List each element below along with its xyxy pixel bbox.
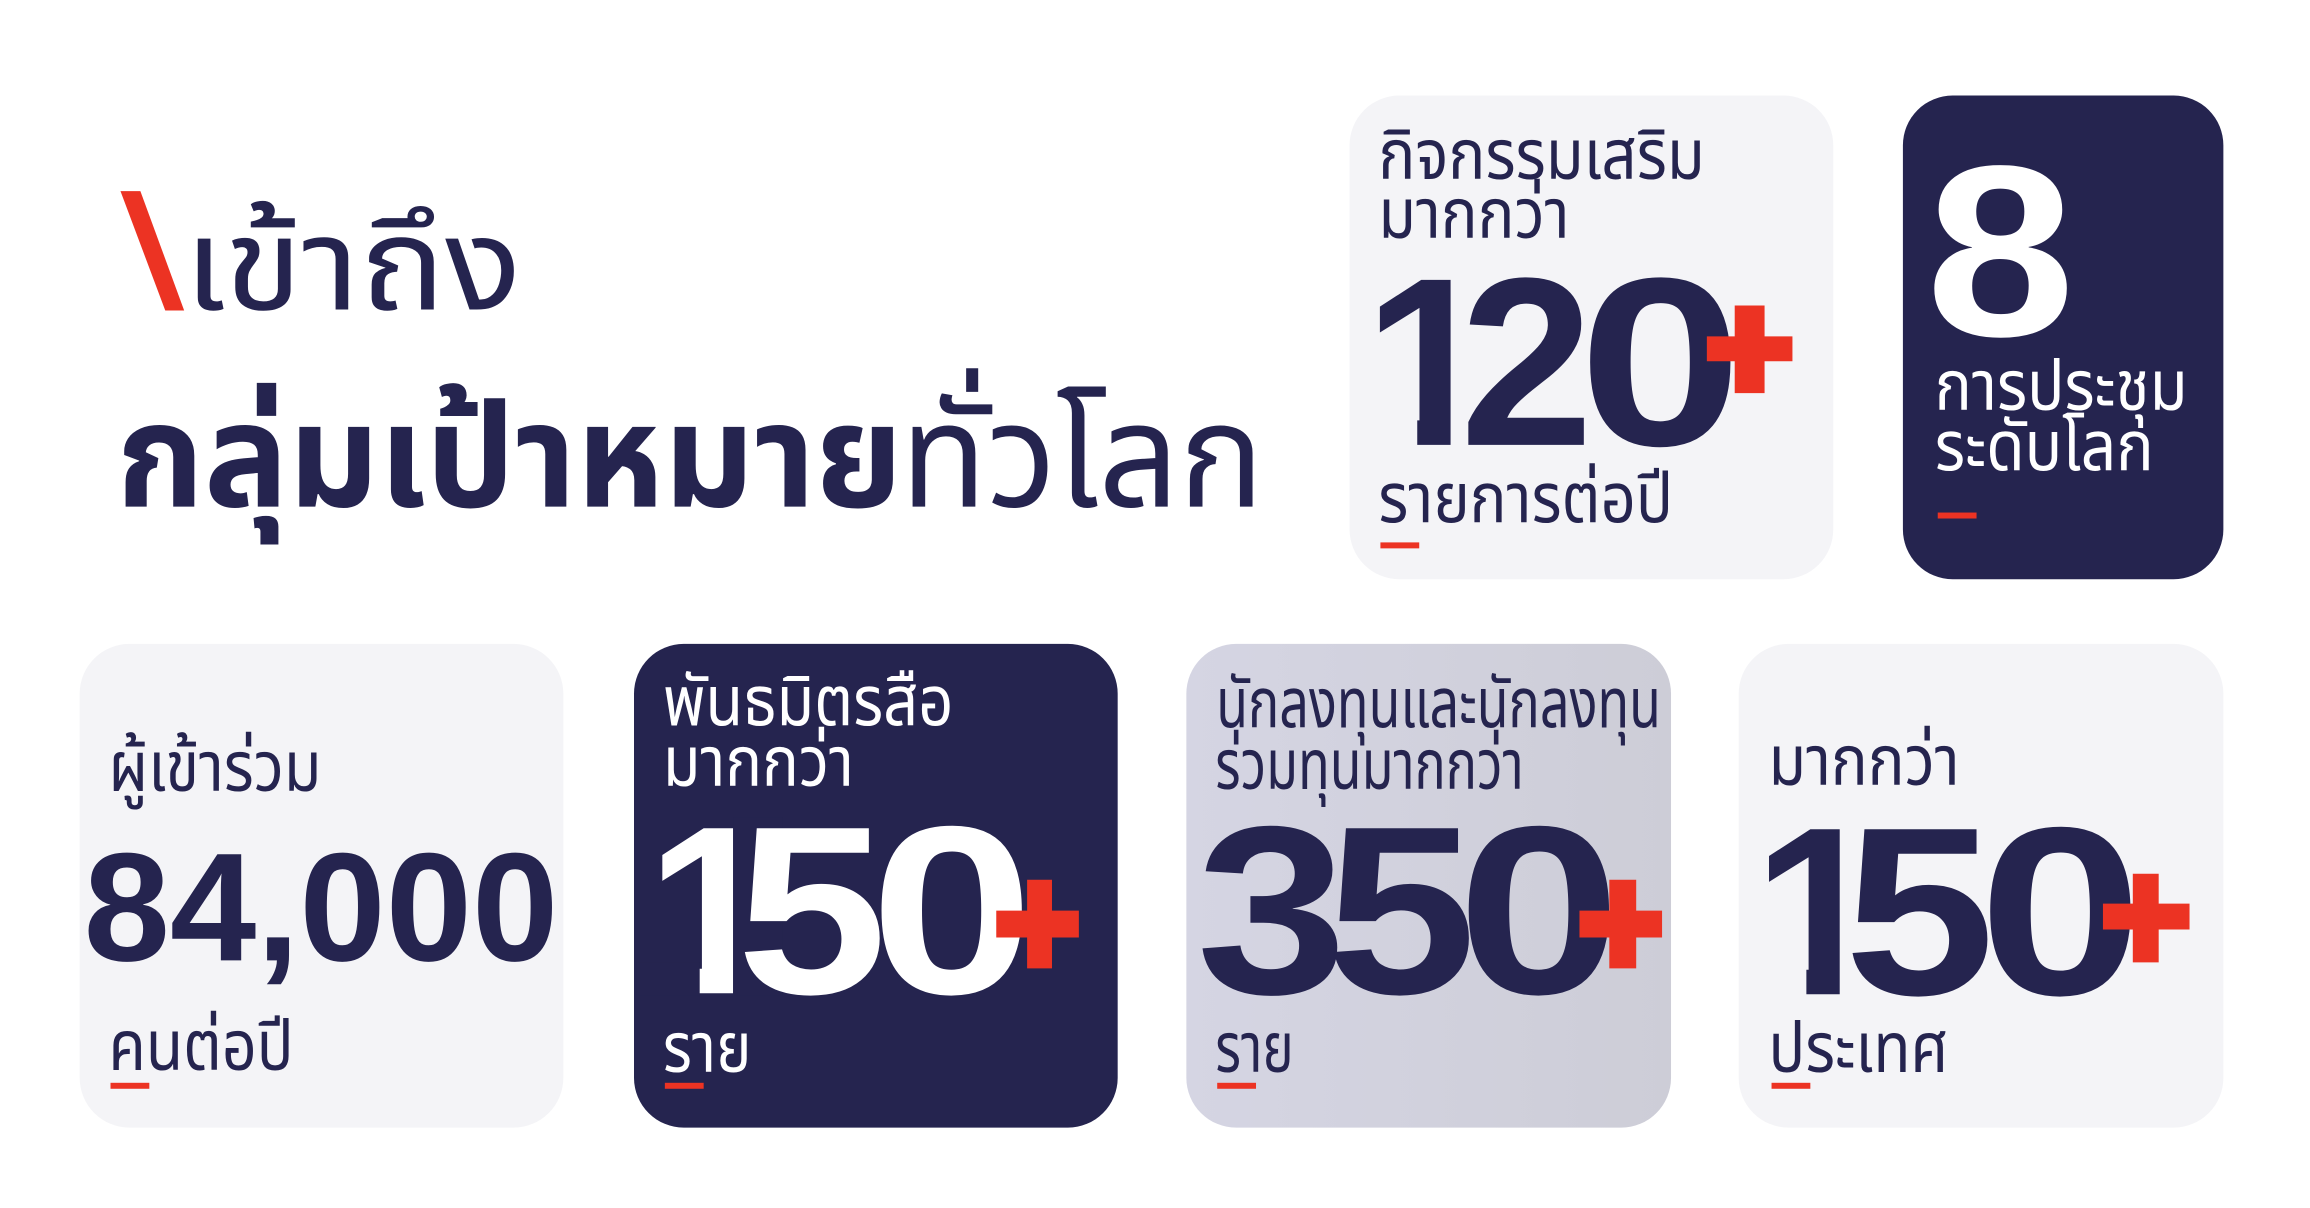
number: 0 [1578,228,1743,496]
panel: investors 350+ [1186,644,1671,1128]
label: มากกว่า [663,723,854,801]
label: การประชุม [1935,347,2188,428]
number [1354,228,1743,496]
number: 1 [646,776,779,1044]
label: ร่วมทุนมากกว่า [1215,726,1524,807]
number: 1 [1753,777,1886,1045]
number: 5 [1326,777,1476,1045]
title [116,191,1264,545]
red underline [1772,1083,1810,1089]
title line 2 [116,368,1264,545]
unit: รายการต่อปี [1378,459,1673,537]
unit: ประเทศ [1769,1009,1949,1087]
red underline [1938,513,1977,519]
title line 2: กลุ่มเป้าหมาย [116,375,903,545]
unit: คนต่อปี [109,1007,294,1085]
number: 1 [1363,228,1497,496]
number [637,776,1034,1045]
panel: countries 150+ [1739,644,2223,1128]
label [1935,347,2188,486]
red underline [1217,1083,1256,1089]
panel: activities 120+ [1350,96,1833,579]
label: มากกว่า [1769,722,1960,800]
title line 2: ทั่วโลก [901,368,1264,538]
icon: plus [1579,880,1662,968]
number: 3 [1196,777,1347,1045]
number: 8 [1926,114,2075,387]
unit: ราย [663,1009,751,1087]
number: 0 [1979,777,2143,1045]
number: 84,000 [84,820,558,993]
label: พันธมิตรสือ [663,663,953,741]
icon: plus [996,880,1079,968]
label: นักลงทุนและนักลงทุน [1216,665,1661,746]
red underline [665,1083,704,1089]
label [1215,665,1661,807]
label: ระดับโลก [1935,408,2154,486]
label [1378,116,1705,253]
title line 1: เข้าถึง [184,194,522,338]
label [663,663,953,801]
red underline [1380,542,1419,548]
number: 0 [870,776,1034,1044]
number [1744,777,2143,1046]
panel: attendees 84,000 [80,644,563,1128]
number: 5 [737,777,887,1045]
label: ผู้เข้าร่วม [109,728,322,810]
number: 2 [1460,228,1593,496]
icon: plus [1707,306,1792,393]
label: มากกว่า [1378,175,1570,253]
number: 0 [1457,776,1621,1044]
panel: media partners 150+ [634,644,1118,1128]
number [1196,776,1621,1045]
number: 5 [1844,778,1995,1046]
panel: 8 global conferences [1903,96,2223,579]
icon: plus [2103,874,2190,962]
red underline [111,1083,149,1089]
unit: ราย [1215,1009,1294,1087]
red slash [120,191,184,311]
label: กิจกรรมเสริม [1378,116,1705,194]
